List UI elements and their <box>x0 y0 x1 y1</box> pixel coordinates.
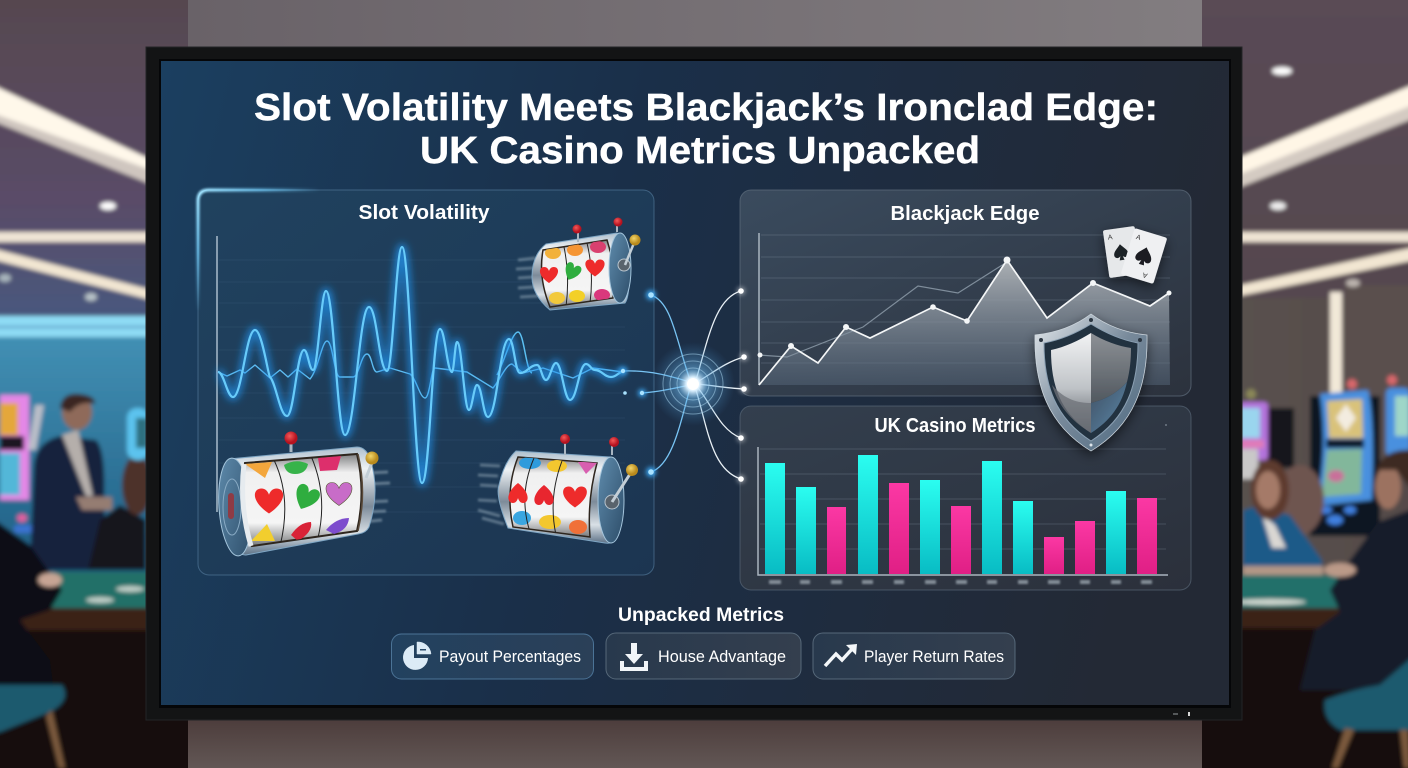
title <box>254 87 1158 172</box>
blue nodes <box>619 290 656 477</box>
icon: pie chart <box>403 642 431 670</box>
heading: slot volatility: Slot Volatility <box>358 202 490 224</box>
pill: player return rates: Player Return Rates <box>864 648 1004 666</box>
main wave <box>218 247 625 483</box>
icon: trend arrow <box>825 644 857 666</box>
volatility chart <box>217 236 625 512</box>
heading: unpacked metrics: Unpacked Metrics <box>618 605 784 626</box>
bar chart <box>758 447 1168 584</box>
pill: player return rates <box>813 633 1015 679</box>
icon: playing cards: A <box>1107 234 1113 242</box>
heading: uk casino metrics: UK Casino Metrics <box>874 415 1036 437</box>
connector network <box>619 287 748 483</box>
heading: blackjack edge: Blackjack Edge <box>890 203 1040 225</box>
white nodes <box>737 287 748 483</box>
thin secondary wave <box>218 341 623 398</box>
title: Slot Volatility Meets Blackjack’s Ironclad Edge: <box>254 87 1158 129</box>
panel: slot volatility <box>198 190 654 575</box>
area chart <box>758 233 1172 385</box>
monitor bezel <box>146 47 1242 720</box>
wave glow <box>218 247 625 483</box>
pill: payout percentages <box>392 634 594 679</box>
blue connectors <box>623 295 690 472</box>
white connectors <box>696 291 744 479</box>
monitor status lights <box>1173 712 1190 716</box>
panel background <box>740 406 1191 590</box>
icon: playing cards: A <box>1142 271 1149 279</box>
panel: uk casino metrics <box>740 406 1191 590</box>
hub glow and rings <box>651 342 735 426</box>
pill: house advantage <box>606 633 801 679</box>
panel: blackjack edge <box>740 190 1191 396</box>
small indicator dot <box>1165 424 1167 426</box>
icon: slot reel, lower right <box>478 434 638 543</box>
background: blurred casino room, right side <box>1195 0 1408 768</box>
icon: shield <box>1035 314 1147 451</box>
background: blurred casino room, left side <box>0 0 195 768</box>
icon: slot reel, lower left <box>216 432 390 557</box>
icon: playing cards <box>1103 226 1167 284</box>
panel background <box>198 190 654 575</box>
pill: house advantage: House Advantage <box>658 648 786 666</box>
title: UK Casino Metrics Unpacked <box>420 130 980 172</box>
illegible axis tick labels <box>769 580 1152 584</box>
icon: playing cards: A <box>1135 234 1142 242</box>
icon: slot reel, top right <box>516 218 640 310</box>
panel background <box>740 190 1191 396</box>
screen <box>159 59 1231 708</box>
centre line glow <box>218 368 625 376</box>
section: unpacked metrics <box>392 605 1015 679</box>
wall above monitor <box>188 0 1202 50</box>
wall below monitor <box>188 718 1202 768</box>
icon: download tray <box>620 643 648 671</box>
pill: payout percentages: Payout Percentages <box>439 648 581 666</box>
